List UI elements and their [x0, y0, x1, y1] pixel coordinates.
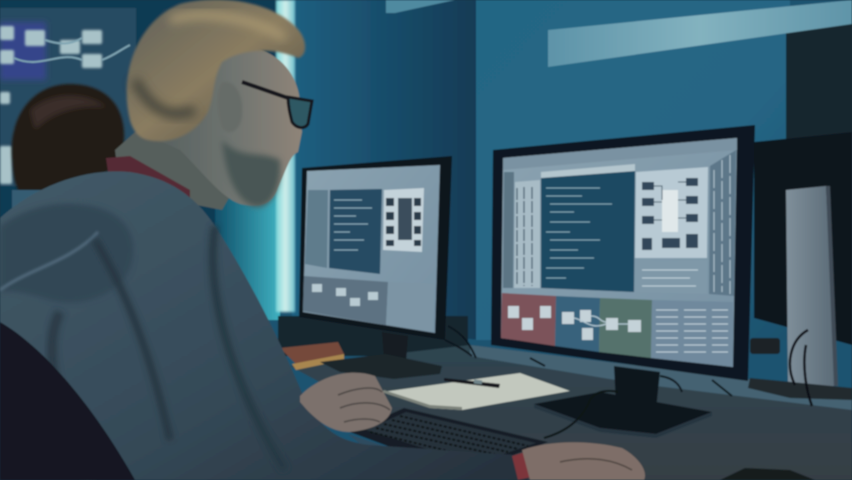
neck: [115, 110, 245, 210]
large monitor title bars: [503, 138, 737, 170]
chair: [0, 322, 135, 480]
man: [0, 0, 536, 480]
light strip: [276, 0, 295, 312]
hand on keyboard: [300, 373, 392, 432]
large monitor info panel: [635, 260, 707, 294]
mouse on desk: [720, 468, 815, 480]
ceiling fixture: [386, 0, 852, 67]
glasses: [242, 82, 312, 128]
hood fold: [0, 204, 133, 302]
beard: [222, 140, 280, 207]
cables: [445, 326, 732, 396]
small monitor stand: [320, 332, 442, 379]
wall display behind: [0, 8, 136, 186]
large monitor circuit diagram: [635, 167, 708, 258]
keyboard: [348, 408, 548, 470]
books on desk: [280, 342, 344, 370]
small monitor diagram: [383, 188, 424, 252]
hand on mouse: [522, 442, 645, 480]
large monitor right list: [709, 150, 736, 296]
head: [132, 44, 302, 206]
small monitor code pane: [329, 189, 382, 274]
hoodie: [0, 171, 530, 480]
large monitor: [491, 125, 755, 438]
large monitor stand: [534, 366, 712, 438]
shirt collar: [106, 156, 190, 198]
large monitor code pane: [541, 164, 635, 292]
large monitor node editor: [501, 293, 652, 358]
colleague head: [12, 84, 124, 212]
right monitor: [748, 132, 852, 406]
large monitor file list: [503, 172, 540, 288]
cable on desk: [544, 391, 618, 438]
sleeve cuff: [512, 450, 536, 480]
ear: [218, 82, 242, 132]
small monitor node strip: [303, 276, 388, 325]
small monitor: [299, 156, 452, 379]
large monitor data table: [651, 300, 733, 367]
desk: [290, 345, 852, 480]
notebook and pen: [382, 373, 570, 410]
hair: [127, 0, 305, 141]
small monitor side list: [305, 190, 328, 268]
desk edge rail: [470, 345, 852, 410]
